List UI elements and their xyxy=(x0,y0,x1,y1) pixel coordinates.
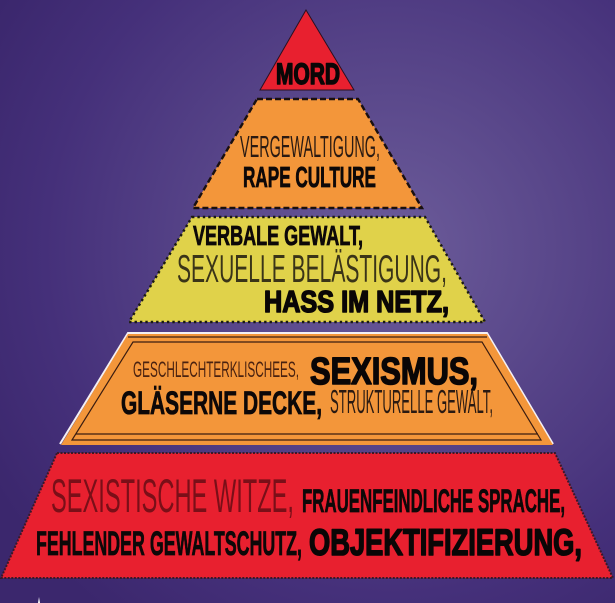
label: Mord: MORD xyxy=(276,58,340,91)
label: Sexismus: SEXISMUS, xyxy=(310,351,478,393)
label: gläserne Decke: GLÄSERNE DECKE, xyxy=(121,385,322,421)
pyramid tier: sexistische Witze xyxy=(1,453,613,578)
label: Geschlechterklischees: GESCHLECHTERKLISCHEES, xyxy=(133,357,299,382)
label: verbale Gewalt: VERBALE GEWALT, xyxy=(193,220,363,251)
pyramid tier: Mord xyxy=(260,10,354,91)
pyramid tier: verbale Gewalt xyxy=(129,217,485,322)
label: fehlender Gewaltschutz: FEHLENDER GEWALTSCHUTZ, xyxy=(36,525,302,563)
pyramid tier: Vergewaltigung xyxy=(193,99,422,208)
pyramid tier: Vergewaltigung: VERGEWALTIGUNG, xyxy=(240,129,380,164)
pyramid tier: Sexismus xyxy=(60,333,553,445)
label: sexistische Witze: SEXISTISCHE WITZE, xyxy=(51,469,294,522)
label: Rape Culture: RAPE CULTURE xyxy=(243,162,376,194)
label: Hass im Netz: HASS IM NETZ, xyxy=(264,284,449,319)
